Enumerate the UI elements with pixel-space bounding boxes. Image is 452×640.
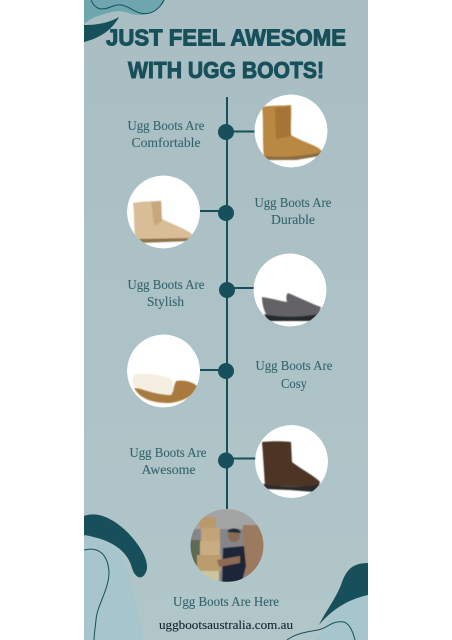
title xyxy=(106,24,346,83)
item 2: durable label xyxy=(254,195,332,227)
item 4: cosy label: Cosy xyxy=(281,376,307,391)
item 1: tan tall boot photo xyxy=(254,94,328,168)
shape: top-left blobs xyxy=(84,0,165,42)
item 3: grey slipper photo xyxy=(254,254,326,326)
item 4: cosy label xyxy=(256,358,333,391)
item 4: moccasin photo xyxy=(127,334,200,408)
title: WITH UGG BOOTS! xyxy=(128,57,324,83)
item 2: durable label: Ugg Boots Are xyxy=(254,195,332,210)
item 6: delivery person photo xyxy=(190,509,264,583)
item 5: awesome label: Awesome xyxy=(142,462,196,477)
item 1: comfortable label: Ugg Boots Are xyxy=(128,118,205,133)
title: JUST FEEL AWESOME xyxy=(106,24,346,50)
timeline with connectors and dots xyxy=(200,97,256,509)
item 1: comfortable label: Comfortable xyxy=(132,135,201,150)
decorative shapes xyxy=(84,0,368,640)
background panel xyxy=(84,0,368,640)
item 5: awesome label: Ugg Boots Are xyxy=(130,445,207,460)
item 3: stylish label: Ugg Boots Are xyxy=(128,277,205,292)
website url: uggbootsaustralia.com.au xyxy=(159,617,294,632)
shape: bottom-right blobs xyxy=(287,563,368,640)
item 2: sand short boot photo xyxy=(127,176,200,248)
item 5: brown boot photo xyxy=(255,425,328,498)
item 5: awesome label xyxy=(130,445,207,477)
infographic canvas xyxy=(84,0,368,640)
item 2: durable label: Durable xyxy=(271,212,315,227)
shape: bottom-left blobs xyxy=(84,514,147,640)
item 1: comfortable label xyxy=(128,118,205,150)
item 4: cosy label: Ugg Boots Are xyxy=(256,358,333,373)
item 3: stylish label xyxy=(128,277,205,309)
label: ugg boots are here: Ugg Boots Are Here xyxy=(173,594,279,609)
item 3: stylish label: Stylish xyxy=(147,294,184,309)
